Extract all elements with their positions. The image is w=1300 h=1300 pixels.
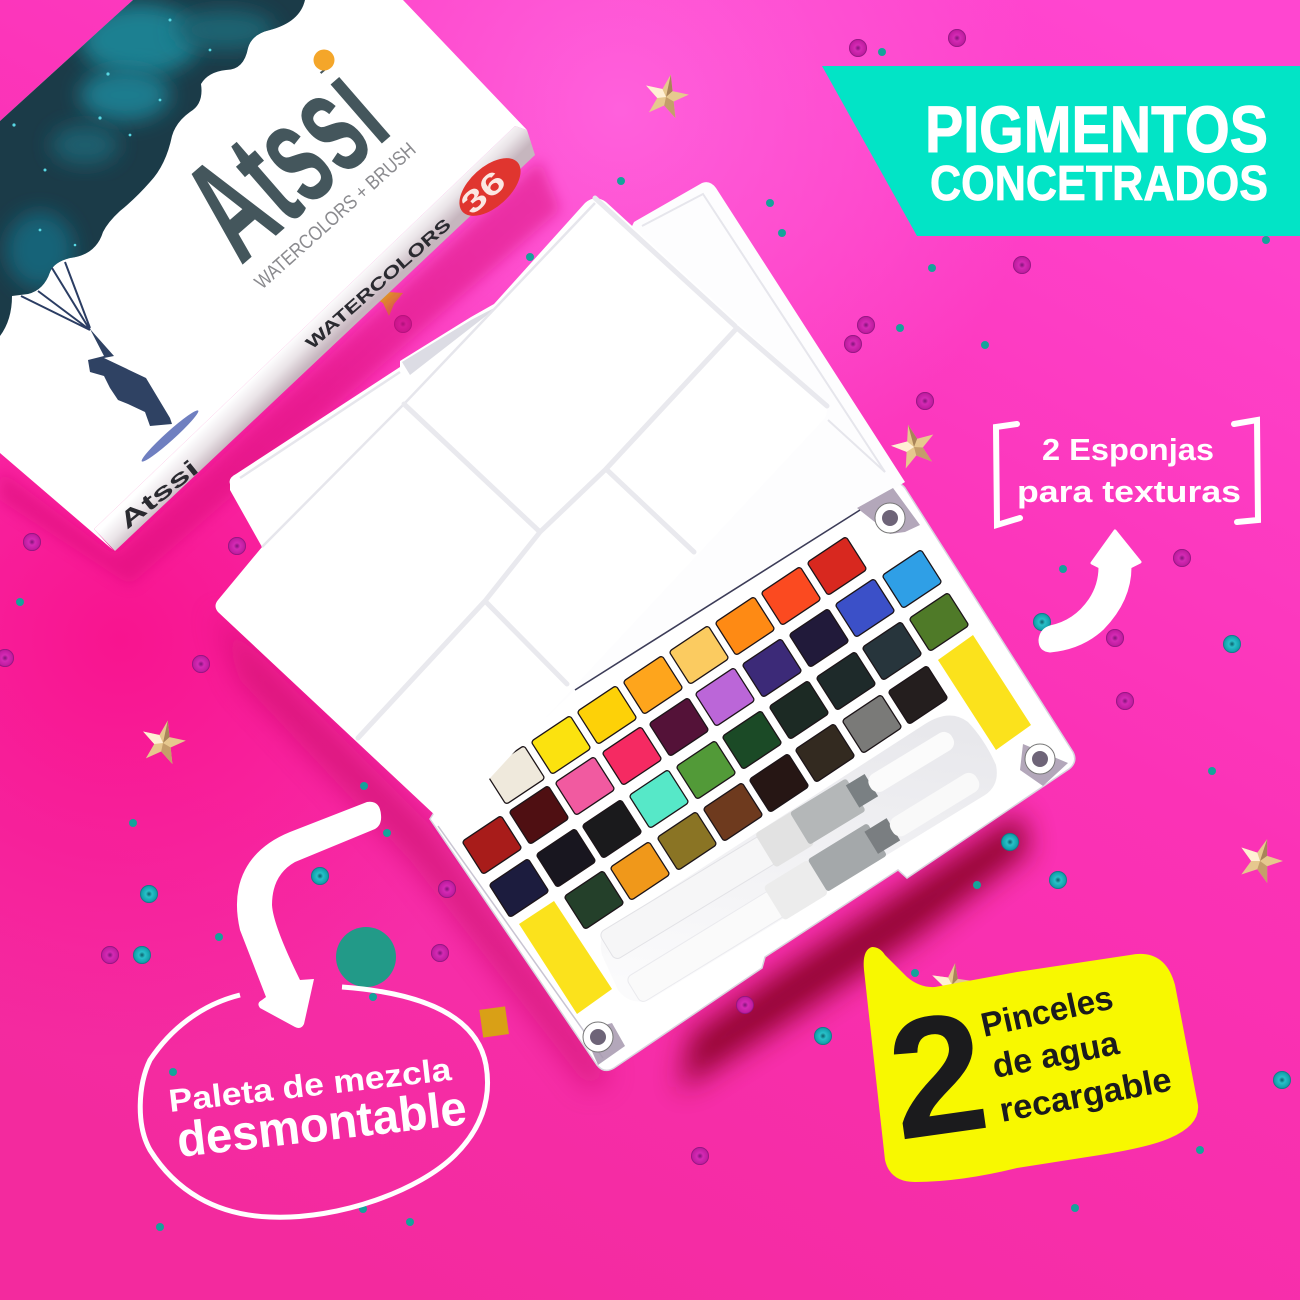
gold stars: [138, 70, 1288, 1006]
yellow sponge top right: [938, 635, 1031, 750]
lid mixing wells: [358, 198, 827, 738]
palette set: [216, 182, 1075, 1070]
brush compartment: [601, 715, 997, 1002]
lid edge shadow: [575, 510, 860, 690]
callout text line one: 2 Esponjas: [1042, 432, 1214, 467]
callout text line one: Paleta de mezcla: [167, 1051, 453, 1119]
lid flange inner: [240, 203, 595, 547]
paint pans row 2: [462, 550, 942, 874]
big number: 2: [878, 975, 998, 1177]
callout outline: [140, 987, 488, 1217]
bracket left: [996, 424, 1020, 525]
spine label: WATERCOLORS: [302, 215, 455, 353]
lower left shadow: [215, 610, 610, 1090]
back mixing lid: [450, 182, 905, 810]
text line three: recargable: [997, 1061, 1175, 1130]
base inner edge: [438, 826, 603, 1058]
box front face: [0, 0, 527, 550]
text line one: Pinceles: [978, 979, 1117, 1045]
box galaxy cloud art: [0, 0, 310, 340]
arrow: to mixing palette: [237, 802, 381, 1028]
yellow speech bubble: [864, 947, 1198, 1182]
yellow sponge bottom left: [519, 901, 612, 1014]
corner recesses: [583, 488, 1068, 1065]
front mixing lid: [216, 198, 827, 820]
callout text line two: para texturas: [1017, 474, 1241, 509]
balloon strings and figure: [21, 262, 201, 465]
set shadow: [680, 812, 1030, 1090]
badge number: 36: [455, 165, 513, 221]
callout: mixing palette: [140, 987, 488, 1217]
box shadow: [0, 160, 560, 585]
box spine circle badge: [449, 147, 531, 227]
paint pans row 3: [489, 592, 969, 918]
back lid inner rim: [642, 194, 885, 472]
box subtitle: WATERCOLORS + BRUSH: [251, 139, 420, 294]
banner: pigmentos concentrados: [822, 66, 1300, 236]
paint pans row 4: [564, 666, 948, 930]
paint pans row 1: [485, 536, 867, 804]
base box: [430, 483, 1075, 1070]
water brush one: [597, 720, 963, 964]
watercolor product box: [0, 0, 560, 585]
box spine: [94, 126, 535, 551]
text line two: de agua: [989, 1024, 1123, 1086]
corner screws: [583, 503, 1055, 1052]
callout text line two: desmontable: [174, 1081, 469, 1168]
bracket right: [1234, 420, 1258, 522]
lid flange shading: [402, 305, 500, 375]
water brushes: [597, 720, 988, 1007]
callout: sponges: [996, 420, 1258, 525]
star under box edge: [360, 290, 403, 316]
arrow: to sponges: [1040, 531, 1140, 651]
confetti: gold square: [479, 1006, 509, 1038]
spine brand: Atssi: [114, 455, 203, 534]
water brush two: [623, 762, 988, 1007]
callout: water brushes: [864, 947, 1198, 1182]
box logo dot: [307, 50, 334, 73]
confetti: large teal disc: [336, 927, 396, 987]
